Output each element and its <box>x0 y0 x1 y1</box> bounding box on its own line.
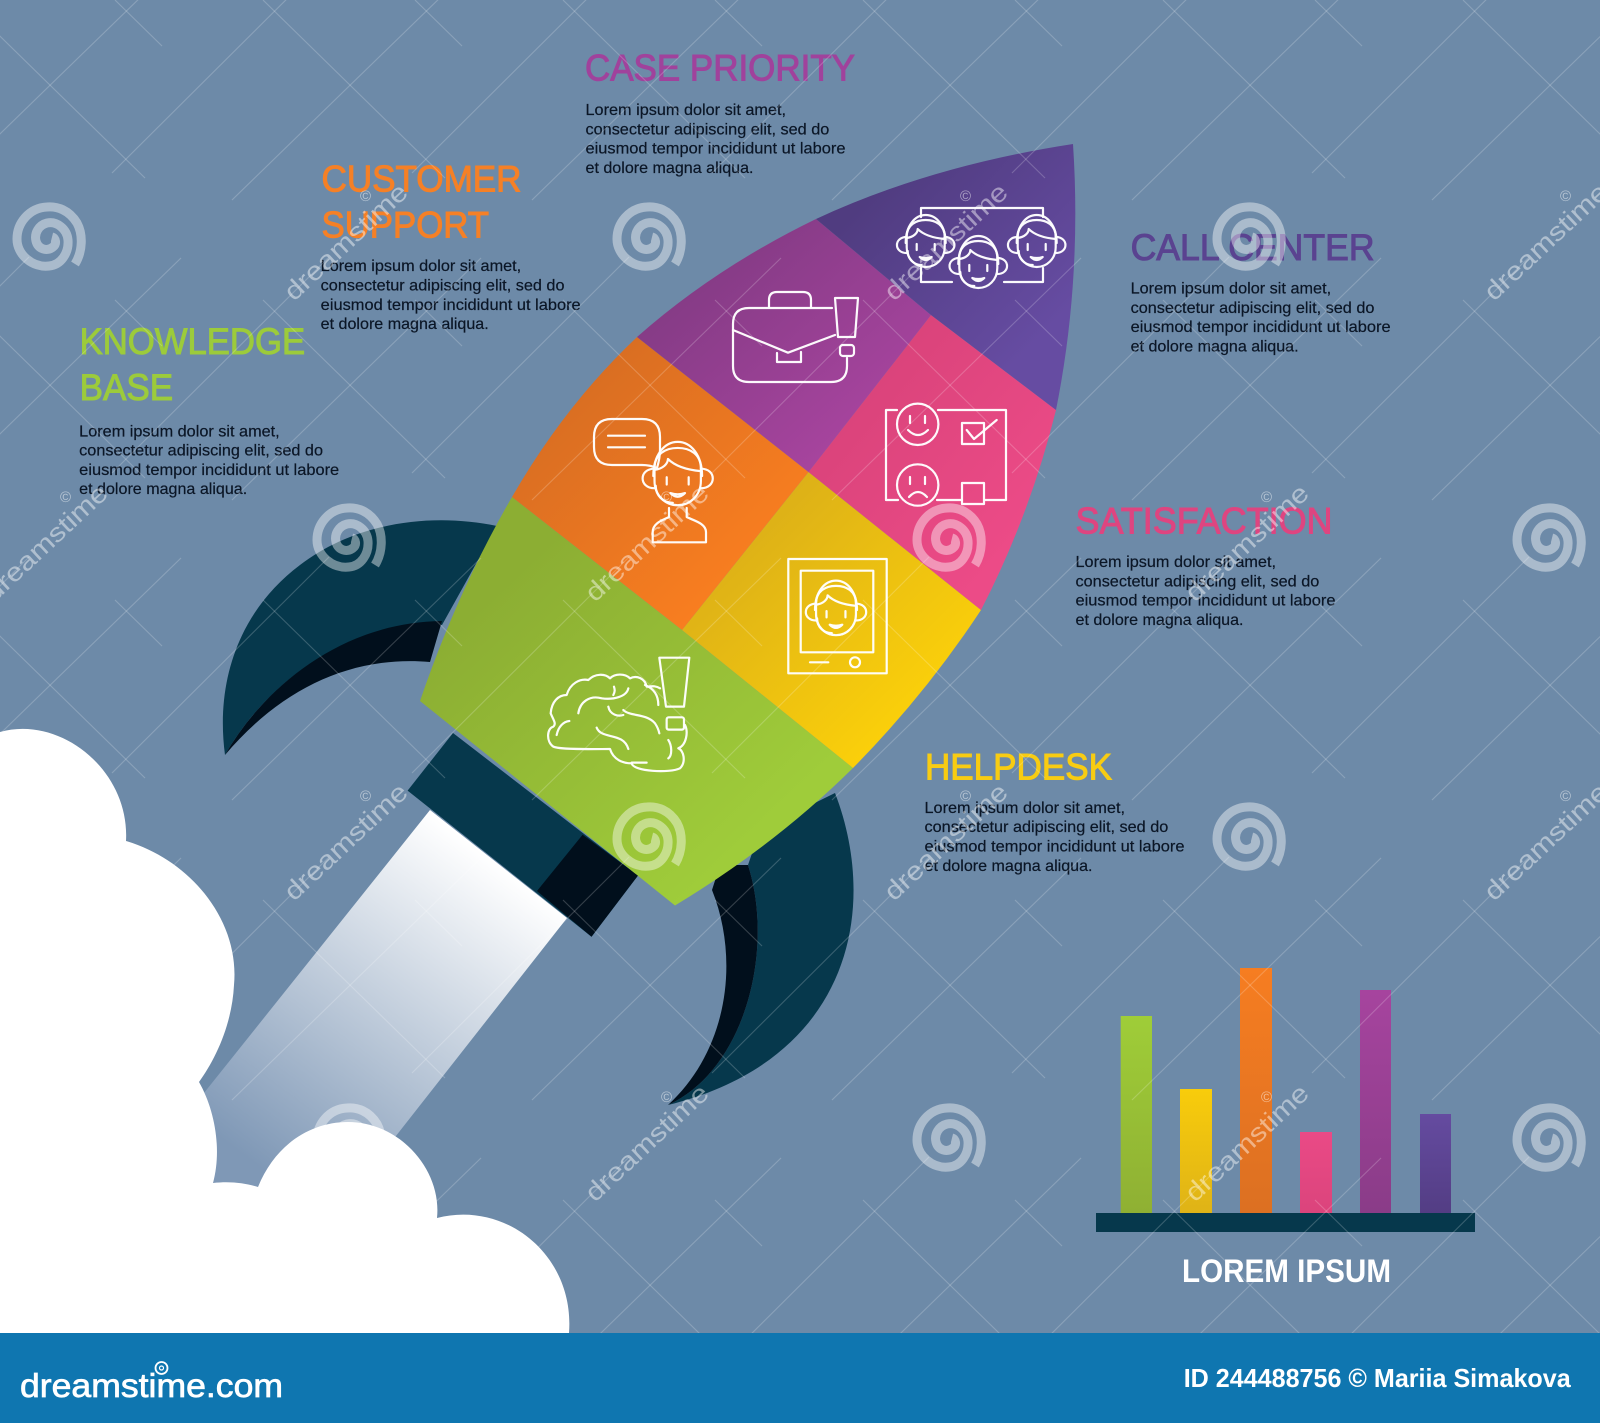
text: helpdesk body: Lorem ipsum dolor sit amet, <box>924 800 1125 817</box>
heading: knowledge base: KNOWLEDGE <box>80 321 305 362</box>
text: case priority body: et dolore magna aliqua. <box>586 160 754 177</box>
bar: yellow <box>1180 1089 1212 1213</box>
bar: green <box>1121 1016 1152 1213</box>
smoke cloud <box>0 729 569 1333</box>
block: satisfaction <box>1076 500 1336 629</box>
heading: customer support: SUPPORT <box>322 204 489 245</box>
watermark overlay: dreamstime <box>579 1078 715 1207</box>
text: knowledge base body <box>79 423 339 498</box>
icon: brain with exclamation <box>548 658 689 771</box>
icon: briefcase with exclamation <box>733 292 858 382</box>
watermark overlay: © <box>960 788 971 805</box>
block: helpdesk <box>924 746 1185 875</box>
watermark overlay: © <box>60 489 71 506</box>
heading: customer support: CUSTOMER <box>322 159 522 200</box>
bar: purple <box>1360 990 1391 1213</box>
text: satisfaction body: consectetur adipiscing elit, sed do <box>1076 573 1319 590</box>
text: customer support body <box>321 258 581 333</box>
text: satisfaction body <box>1076 554 1336 629</box>
text: case priority body: eiusmod tempor incididunt ut labore <box>586 141 846 158</box>
watermark overlay: dreamstime <box>1179 1078 1315 1207</box>
block: call center <box>1131 227 1391 356</box>
text: case priority body: consectetur adipiscing elit, sed do <box>586 121 829 138</box>
icon: satisfaction survey <box>886 404 1006 506</box>
segment: dark purple call center <box>816 144 1075 410</box>
text: customer support body: Lorem ipsum dolor sit amet, <box>321 258 521 275</box>
text: satisfaction body: eiusmod tempor incididunt ut labore <box>1076 593 1336 610</box>
watermark overlay: © <box>360 188 371 205</box>
bar: pink <box>1300 1132 1332 1213</box>
text: call center body: consectetur adipiscing elit, sed do <box>1131 300 1375 317</box>
watermark overlay: © <box>360 788 371 805</box>
text: customer support body: eiusmod tempor incididunt ut labore <box>321 297 581 314</box>
footer banner <box>0 1333 1600 1423</box>
text: case priority body <box>586 102 846 177</box>
text: call center body: Lorem ipsum dolor sit amet, <box>1131 280 1331 298</box>
watermark overlay: © <box>661 489 672 506</box>
icon: support agent with speech bubble <box>594 419 713 542</box>
heading: knowledge base: BASE <box>80 367 173 408</box>
bar: orange <box>1240 968 1272 1213</box>
text: helpdesk body <box>924 800 1185 875</box>
chart baseline <box>1096 1213 1475 1232</box>
watermark overlay: © <box>661 1089 672 1106</box>
heading: call center: CALL CENTER <box>1131 227 1375 268</box>
block: knowledge base <box>79 321 339 498</box>
block: case priority <box>585 48 855 177</box>
text: call center body: et dolore magna aliqua. <box>1131 338 1299 356</box>
rocket exhaust flame <box>180 810 567 1220</box>
rear rocket fin left <box>223 520 497 755</box>
watermark overlay: dreamstime <box>1179 478 1315 607</box>
text: customer support body: consectetur adipiscing elit, sed do <box>321 278 565 294</box>
rear rocket fin right <box>668 793 854 1105</box>
footer logo: dreamstime.com <box>20 1367 283 1404</box>
text: call center body: eiusmod tempor incididunt ut labore <box>1131 319 1391 336</box>
heading: knowledge base <box>80 321 305 408</box>
text: satisfaction body: et dolore magna aliqua. <box>1076 612 1244 629</box>
watermark overlay: dreamstime <box>1478 777 1600 906</box>
footer credit: ID 244488756 © Mariia Simakova <box>1184 1363 1571 1393</box>
heading: helpdesk: HELPDESK <box>925 746 1112 787</box>
segment: purple case priority <box>637 219 931 472</box>
watermark overlay: © <box>1560 188 1571 205</box>
watermark overlay: © <box>1261 1089 1272 1106</box>
text: customer support body: et dolore magna aliqua. <box>321 316 489 333</box>
bar: dark purple <box>1420 1114 1451 1213</box>
bar chart <box>1096 968 1475 1289</box>
text: knowledge base body: Lorem ipsum dolor sit amet, <box>79 423 280 440</box>
watermark overlay: © <box>1261 489 1272 506</box>
heading: case priority: CASE PRIORITY <box>585 48 855 89</box>
watermark overlay: dreamstime <box>579 478 715 607</box>
chart label: LOREM IPSUM <box>1182 1253 1391 1289</box>
watermark overlay: © <box>960 188 971 205</box>
segment: green knowledge base <box>420 497 853 906</box>
heading: customer support <box>322 159 522 245</box>
icon: tablet with agent <box>788 559 887 673</box>
rocket nozzle <box>408 733 638 937</box>
watermark overlay: © <box>1560 788 1571 805</box>
segment: pink satisfaction <box>808 315 1056 610</box>
text: case priority body: Lorem ipsum dolor sit amet, <box>586 102 786 119</box>
watermark overlay: © <box>60 1089 71 1106</box>
segment: yellow helpdesk <box>682 472 981 768</box>
text: helpdesk body: eiusmod tempor incididunt ut labore <box>924 838 1185 856</box>
watermark overlay: dreamstime <box>878 777 1014 906</box>
icon: call center agents <box>897 208 1065 288</box>
text: helpdesk body: consectetur adipiscing elit, sed do <box>924 819 1168 836</box>
block: customer support <box>321 159 581 333</box>
text: knowledge base body: consectetur adipiscing elit, sed do <box>79 443 323 460</box>
watermark overlay: dreamstime <box>278 177 414 306</box>
segment: orange customer support <box>512 337 808 630</box>
rocket body <box>420 144 1075 906</box>
heading: satisfaction: SATISFACTION <box>1076 500 1332 541</box>
text: call center body <box>1131 280 1391 356</box>
text: knowledge base body: eiusmod tempor incididunt ut labore <box>79 462 339 479</box>
text: helpdesk body: et dolore magna aliqua. <box>924 858 1092 875</box>
text: satisfaction body: Lorem ipsum dolor sit amet, <box>1076 554 1276 571</box>
watermark overlay: dreamstime <box>878 177 1014 306</box>
text: knowledge base body: et dolore magna aliqua. <box>79 481 247 498</box>
watermark overlay: dreamstime <box>278 777 414 906</box>
watermark overlay: dreamstime <box>1478 177 1600 306</box>
